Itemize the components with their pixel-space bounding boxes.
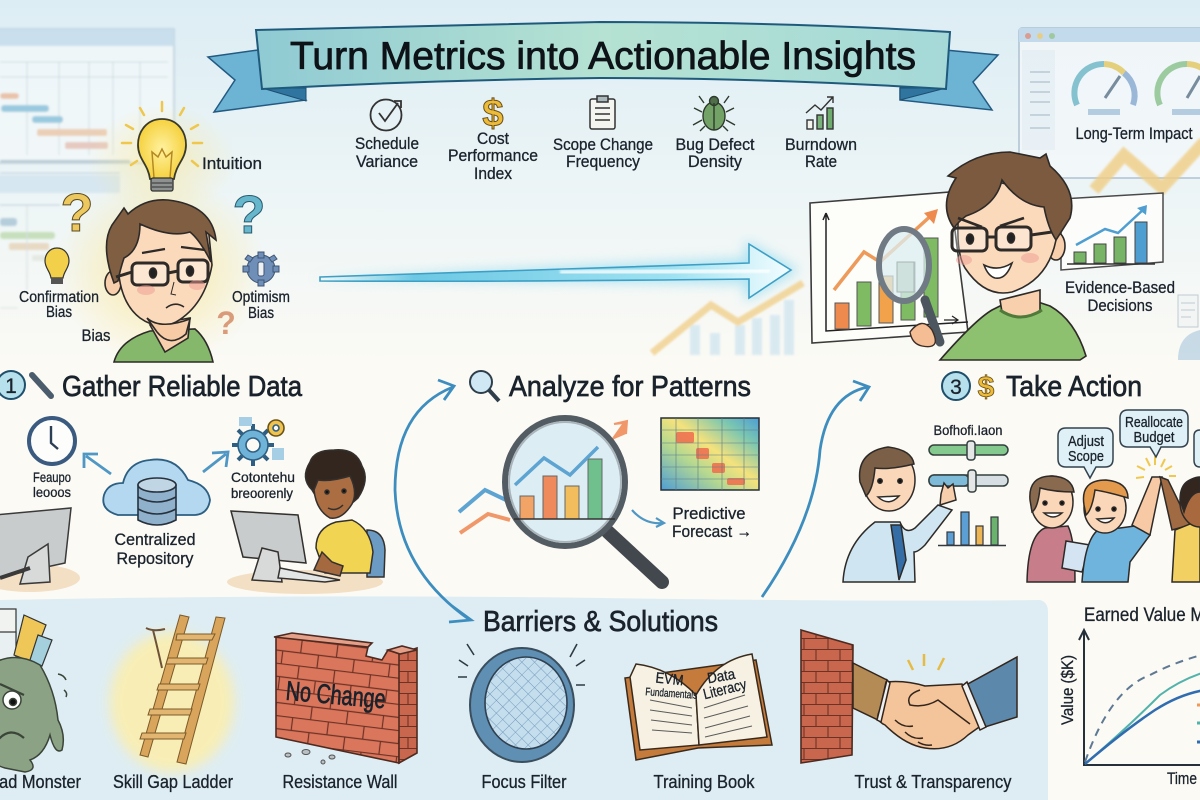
metric: schedule variance: Schedule [355, 134, 419, 153]
icon: clock [29, 418, 75, 464]
mini bars [938, 512, 1006, 546]
icon: dollar: $ [978, 371, 995, 404]
solution: skill gap ladder [110, 615, 234, 792]
bubble: reallocate budget [1120, 410, 1188, 457]
metric: burndown rate [785, 97, 857, 171]
book text: EVM [655, 670, 684, 689]
label: optimism bias [232, 289, 290, 322]
label: Skill Gap Ladder [113, 772, 233, 792]
planned dashed curve [1085, 654, 1200, 762]
icon: light bulb [87, 102, 237, 215]
bubble: reallocate budget: Reallocate [1125, 414, 1183, 431]
smiling person [940, 152, 1086, 360]
bubble: adjust scope: Scope [1068, 448, 1104, 465]
faded gantt charts [0, 29, 174, 308]
big magnifier with chart [505, 418, 662, 582]
rising trend decoration [652, 283, 803, 355]
label: centralized repository: Repository [116, 549, 194, 568]
right computer with person [227, 450, 385, 594]
icon: clipboard [590, 96, 615, 129]
arrow to clock [84, 454, 111, 474]
label: bias: Bias [82, 326, 110, 345]
solution: trust and transparency [801, 630, 1017, 792]
actual blue curve [1085, 690, 1200, 764]
sparkle [908, 654, 944, 670]
brick column [801, 630, 853, 763]
label: optimism bias: Optimism [232, 289, 290, 306]
barrier: resistance wall [274, 633, 417, 792]
arrow to gears [203, 452, 228, 472]
metric: bug defect density [676, 96, 755, 171]
metric: cost performance index: Cost [477, 129, 509, 148]
metric: cost performance index: Performance [448, 146, 538, 165]
metric: bug defect density: Density [688, 152, 742, 171]
rays [458, 644, 585, 685]
filter lens [470, 648, 574, 762]
flow arrow to analyze [395, 380, 471, 622]
left computer [0, 508, 80, 592]
garbled gear label [231, 469, 295, 501]
label: confirmation bias: Bias [46, 304, 72, 321]
step badge 3: 3 [950, 376, 962, 399]
question mark gold: ? [60, 183, 94, 243]
icon: optimism gear [243, 252, 279, 286]
barriers and solutions heading: Barriers & Solutions [483, 606, 718, 638]
step badge 1: 1 [5, 375, 17, 398]
metric: burndown rate: Burndown [785, 135, 857, 154]
icon: wrench [32, 375, 51, 396]
dashboard background [1019, 28, 1200, 178]
step 2 heading: Analyze for Patterns [509, 371, 751, 403]
label: optimism bias: Bias [248, 305, 274, 322]
label: Resistance Wall [282, 772, 398, 792]
label: Focus Filter [482, 772, 566, 792]
label: confirmation bias [19, 289, 99, 321]
icon: rising bars [806, 97, 833, 129]
garbled clock label: leooos [33, 484, 71, 500]
wall text: No Change [285, 676, 387, 714]
book text: Fundamentals [645, 686, 698, 702]
metric: scope change frequency [553, 96, 653, 171]
label: intuition: Intuition [202, 154, 262, 173]
step 1 heading: Gather Reliable Data [62, 371, 303, 403]
legend swatches [1197, 705, 1200, 742]
label: evidence-based decisions: Evidence-Based [1065, 278, 1175, 297]
big glowing arrow [310, 240, 800, 302]
solution: training book [625, 654, 772, 792]
metric: schedule variance: Variance [356, 152, 418, 171]
label: centralized repository: Centralized [114, 530, 196, 549]
step badge 3 [942, 372, 970, 400]
book text [645, 666, 749, 703]
earned value chart [1058, 605, 1200, 788]
garbled clock label: Feaupo [33, 469, 71, 485]
side trend lines [459, 490, 510, 533]
right zigzag decoration [1094, 142, 1200, 190]
high-five sparks [1136, 456, 1176, 478]
step badge 1 [0, 371, 25, 399]
garbled clock label [33, 469, 71, 500]
monster body [0, 658, 67, 772]
metric: scope change frequency: Scope Change [553, 135, 653, 154]
left ribbon tail [208, 50, 306, 112]
icon: bug [693, 96, 735, 131]
thinking person [105, 200, 216, 362]
label: predictive forecast: Predictive [672, 504, 746, 523]
gauges [1074, 64, 1200, 112]
metric: scope change frequency: Frequency [566, 152, 640, 171]
label: Training Book [654, 772, 755, 792]
metric: burndown rate: Rate [805, 152, 837, 171]
metric: cost performance index: Index [474, 164, 512, 183]
book text: Data [706, 666, 737, 687]
earned teal curve [1085, 672, 1200, 764]
icon: magnifier [470, 371, 499, 401]
label: confirmation bias: Confirmation [19, 289, 99, 306]
flow arrow to action [762, 381, 869, 597]
open book [625, 654, 772, 760]
y axis label: Value ($K) [1058, 655, 1077, 725]
icon: gears [232, 417, 284, 466]
step 3 panel: take action [843, 410, 1200, 582]
intuition bias character [19, 102, 290, 365]
axes [1079, 630, 1200, 765]
faded person with document [1178, 295, 1200, 360]
magnifying glass [879, 229, 958, 347]
step 2 panel: analyze [459, 418, 759, 582]
barrier: data overload monster [0, 609, 81, 792]
label: predictive forecast: Forecast → [672, 522, 752, 541]
ladder [140, 615, 225, 764]
garbled gear label: Cotontehu [231, 469, 295, 485]
right ribbon tail [900, 50, 998, 110]
label: Trust & Transparency [854, 772, 1012, 792]
bubble: reallocate budget: Budget [1134, 429, 1175, 446]
solution: focus filter [458, 644, 585, 792]
metric: bug defect density: Bug Defect [676, 135, 755, 154]
bubble: adjust scope: Adjust [1068, 433, 1105, 450]
icon: check circle [370, 100, 402, 130]
rubble [285, 750, 335, 764]
title banner [208, 22, 998, 112]
small evidence chart [1061, 193, 1163, 270]
label: centralized repository [114, 530, 196, 568]
heatmap [661, 418, 759, 490]
barriers band background [0, 596, 1048, 800]
garbled gear label: breoorenly [231, 485, 293, 501]
label: evidence-based decisions [1065, 278, 1175, 315]
twig [146, 628, 165, 668]
book text: Literacy [702, 676, 749, 703]
garbled slider label: Bofhofi.Iaon [934, 422, 1002, 438]
presenter [843, 447, 956, 582]
ribbon body [256, 22, 950, 89]
icon: dollar: $ [482, 93, 504, 135]
label: evidence-based decisions: Decisions [1088, 296, 1152, 315]
icon: cloud with database [103, 459, 210, 525]
wall [274, 633, 417, 763]
bubble: cut-off [1194, 430, 1200, 467]
label: predictive forecast [672, 504, 752, 541]
papers [0, 609, 52, 666]
handshake [853, 657, 1017, 749]
bubble: adjust scope [1058, 428, 1113, 478]
evidence character [810, 152, 1200, 360]
kids high-five [1027, 476, 1200, 582]
metric: cost performance index [448, 93, 538, 183]
question mark small: ? [216, 305, 236, 341]
metric: schedule variance [355, 100, 419, 171]
whiteboard chart [810, 192, 968, 343]
arrow to forecast [632, 510, 664, 527]
arrow top [612, 421, 627, 440]
small bulb [45, 248, 69, 284]
step 3 heading [942, 371, 1142, 404]
sliders [929, 441, 1008, 492]
question mark teal: ? [232, 185, 266, 245]
title: Turn Metrics into Actionable Insights [290, 35, 916, 78]
step 3 heading: Take Action [1006, 371, 1142, 403]
step 1 panel: gather data [0, 417, 385, 594]
